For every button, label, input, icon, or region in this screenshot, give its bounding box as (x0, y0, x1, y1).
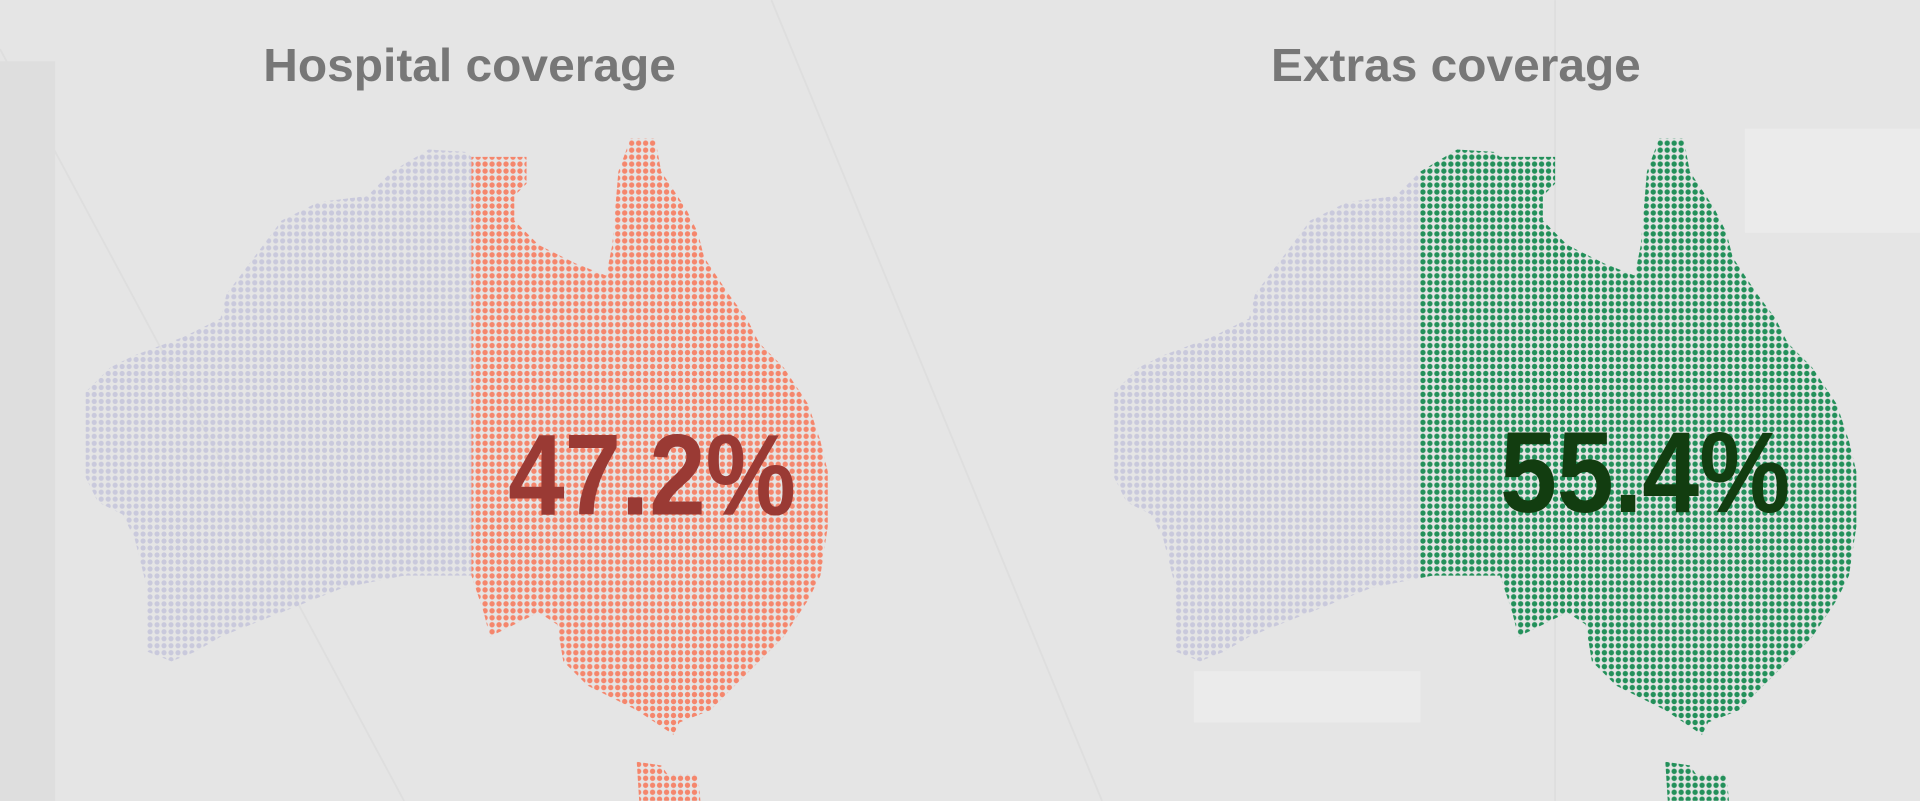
percentage: 47.2%: 47.2% (508, 411, 796, 539)
percentage: 55.4%: 55.4% (1500, 409, 1790, 537)
title: hospital coverage: Hospital coverage (263, 39, 676, 91)
title: extras coverage: Extras coverage (1271, 39, 1641, 91)
